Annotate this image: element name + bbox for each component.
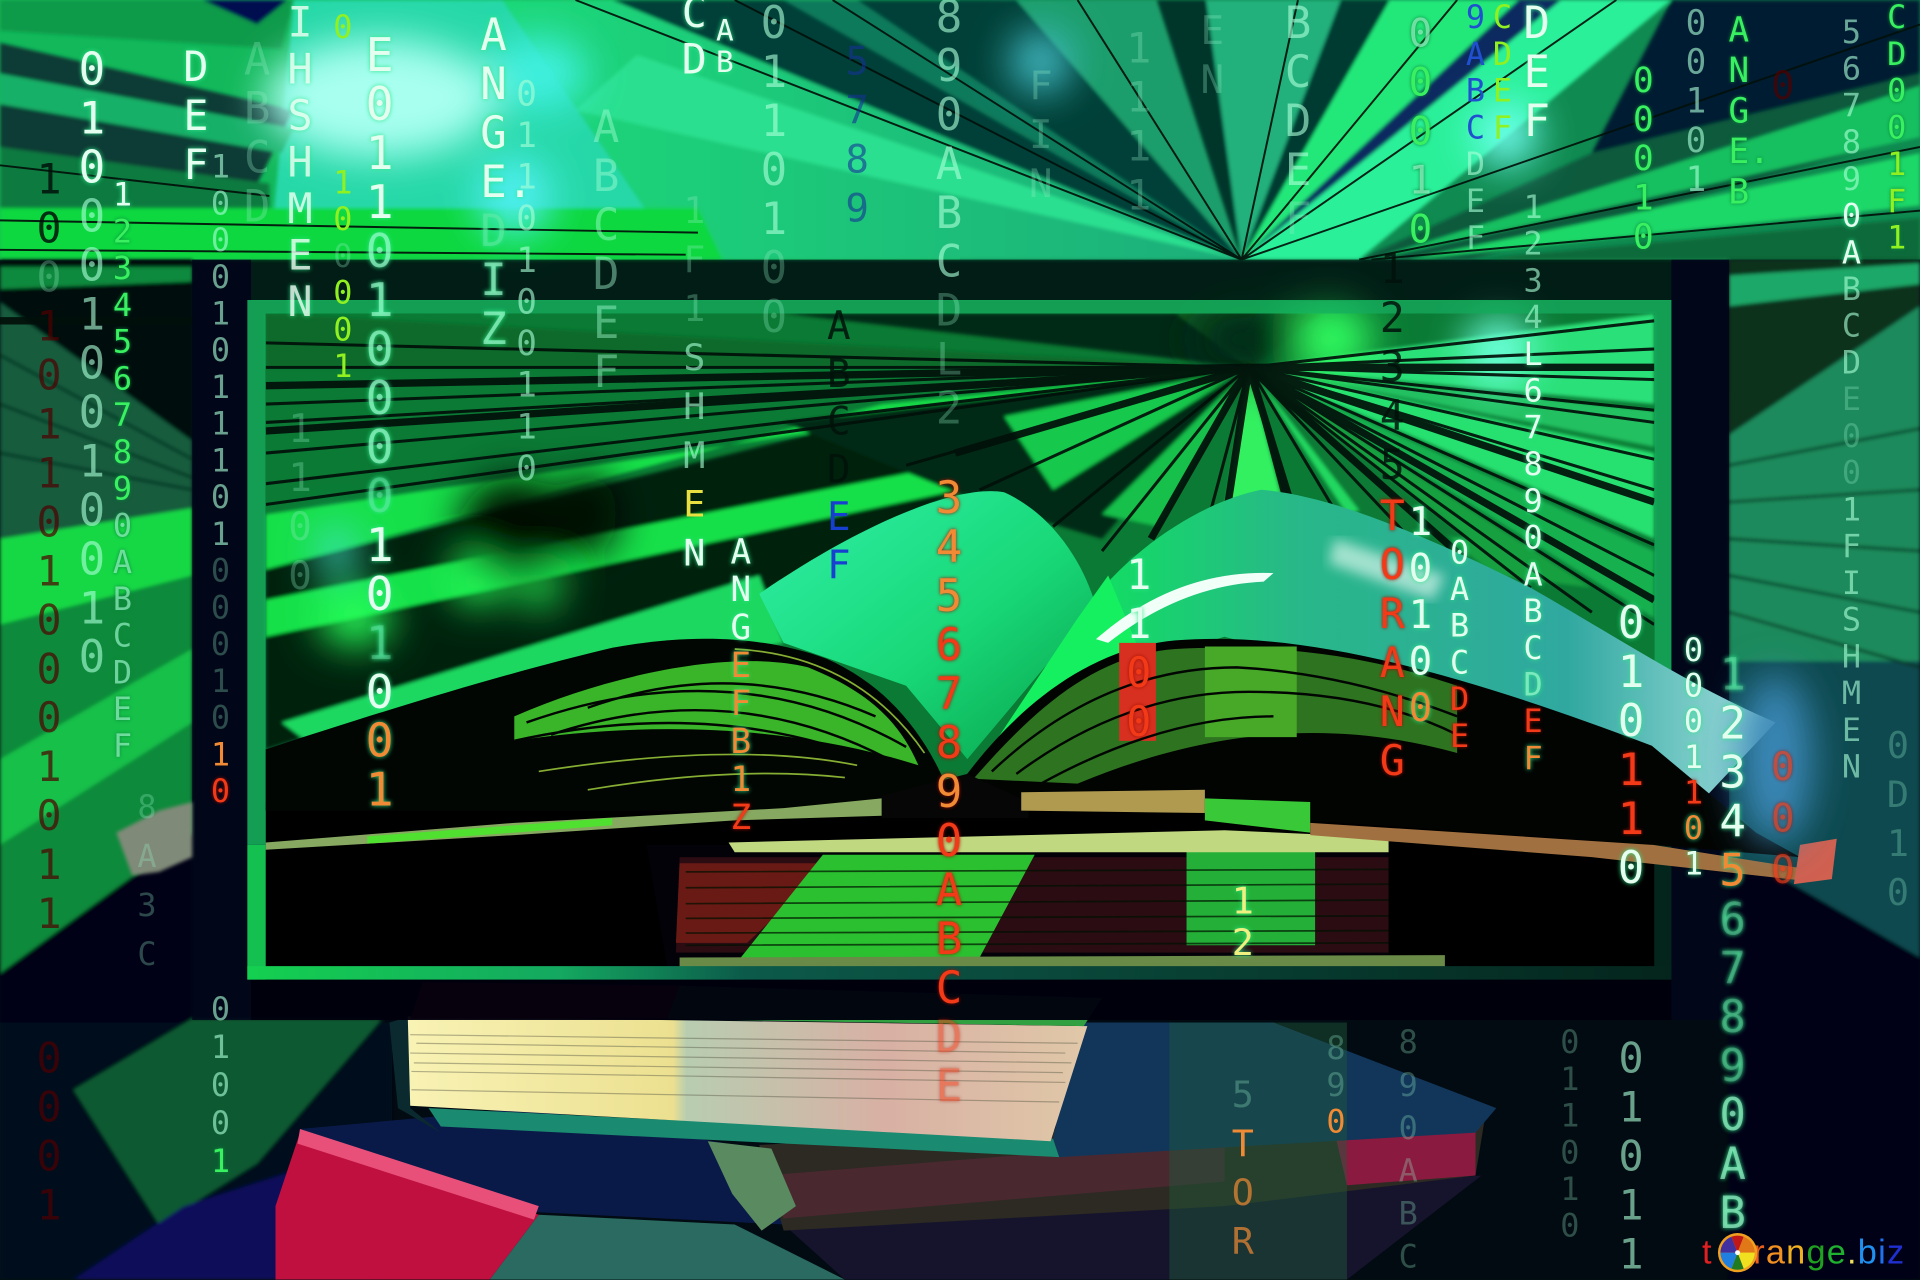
burst rays inside the frame <box>266 313 1654 749</box>
open book: right page block <box>960 639 1800 857</box>
green frame: lower left <box>247 845 266 980</box>
dark frame band: left <box>192 260 251 1020</box>
infographic root: 1234 <box>1523 190 1543 337</box>
infographic root: DEF <box>183 43 208 190</box>
infographic root: ABCDEF <box>593 103 619 398</box>
infographic root: IHSHMEN <box>287 0 313 327</box>
infographic root: FIN <box>1029 62 1053 207</box>
infographic root: AB <box>716 13 734 80</box>
infographic root: EN <box>1200 7 1224 103</box>
matrix code columns, left side <box>36 0 537 1280</box>
book: cream page block with teal cover <box>389 982 1496 1157</box>
infographic root: 1111 <box>1126 24 1151 220</box>
infographic root: 11 00 <box>1126 551 1151 747</box>
infographic root: 5 T OR <box>1232 1074 1254 1264</box>
infographic root: 010 0010010010 <box>79 45 105 683</box>
infographic root: 00010 <box>1633 60 1654 257</box>
black streaks through the rays <box>0 0 1920 624</box>
infographic root: 10 0 1011010001011 <box>36 156 62 939</box>
infographic root: 12345 <box>1380 245 1405 490</box>
dim green strip crossing lower books <box>1169 1022 1347 1280</box>
infographic root: 89 0 <box>1326 1031 1346 1141</box>
infographic root: TORANG <box>1380 492 1405 786</box>
infographic root: 0100 1 <box>211 992 230 1180</box>
book: green and red page edges <box>647 830 1445 972</box>
infographic root: ANGE. D IZ <box>480 11 533 355</box>
infographic root: L67890ABC D E F <box>1523 337 1543 778</box>
bright green frame: top and sides <box>247 300 1671 845</box>
green frame: bottom edge <box>247 966 1671 980</box>
infographic root: 12 <box>1232 880 1254 965</box>
infographic root: 00101 <box>1686 2 1706 200</box>
infographic root: 011010 <box>1560 1025 1579 1245</box>
infographic root: BCDE F <box>1285 0 1311 245</box>
infographic root: 000 <box>1771 743 1795 893</box>
open book: left page block <box>266 639 945 811</box>
infographic root: 1 234 5 6789 0AB <box>1719 650 1746 1239</box>
infographic root: 1010 0 <box>1409 498 1432 731</box>
open book: rising pages <box>759 490 1776 820</box>
infographic root: ANGEFB1Z <box>731 531 751 838</box>
infographic root: 010 11 0 <box>1618 599 1644 894</box>
infographic root: 890ABC DL2 <box>936 0 962 435</box>
infographic root: DEF <box>1523 0 1550 147</box>
icon: colour wheel logo <box>1718 1233 1758 1272</box>
infographic root: ABCD EF <box>827 302 851 588</box>
infographic root: 1F1 SHM E N <box>683 190 705 576</box>
side panels outside the frame <box>0 260 1920 1280</box>
book spine rope at left <box>116 802 192 876</box>
infographic root: ABCD <box>244 36 270 233</box>
infographic root: ANGE.B <box>1728 10 1770 212</box>
infographic root: 890ABC <box>1399 1025 1418 1276</box>
infographic root: CD00 1F1 <box>1887 0 1906 257</box>
infographic root: 0 00 1 0 <box>1409 10 1432 252</box>
infographic root: 9ABC DEF <box>1466 0 1485 257</box>
infographic root: 1 23456789 0ABCDEF <box>113 178 132 765</box>
infographic root: 5789 <box>845 38 869 231</box>
book: brown volume with green spine <box>708 1108 1487 1231</box>
infographic root: 10 0 001 <box>333 165 352 386</box>
infographic root: 0110100110 <box>516 73 537 489</box>
dark frame band: top <box>251 260 1671 301</box>
open book: cover edge strip <box>266 774 1837 884</box>
green frame: lower right <box>1654 845 1671 980</box>
upper left light washes <box>0 0 1242 260</box>
infographic root: 0001 1 0 1 <box>1684 633 1703 883</box>
infographic root: 10001011101 00010 1 0 <box>211 149 230 811</box>
upper right ray fan <box>1157 0 1920 260</box>
infographic root: 8A3C <box>137 790 157 973</box>
infographic root: 0001 <box>36 1035 62 1231</box>
dark frame band: right <box>1671 260 1729 1020</box>
infographic root: 0ABC DE <box>1450 535 1469 756</box>
infographic root: 1100 <box>288 405 312 599</box>
matrix code columns, right side <box>490 0 1909 1280</box>
infographic root: CDEF <box>1493 0 1512 147</box>
infographic root: E011010000101001 <box>366 28 394 817</box>
blue light behind the book end <box>1739 673 1812 845</box>
infographic root: 0 <box>333 10 352 47</box>
infographic root: 0 <box>1771 62 1795 109</box>
infographic root: 0D10 <box>1887 725 1909 915</box>
matrix code columns, centre <box>490 0 1311 1280</box>
infographic root: 345 678 9 0ABC DE <box>936 474 962 1112</box>
infographic root: 01011 <box>1618 1035 1644 1280</box>
watermark: torange.biz: t range.biz <box>1702 1233 1905 1271</box>
infographic root: 01101 00 <box>761 0 787 343</box>
infographic root: 56789 0A BCD E00 1FISHMEN <box>1842 15 1861 786</box>
dark frame band: bottom <box>251 980 1671 1020</box>
glow spots and bokeh <box>263 29 1538 645</box>
lower black interior of frame <box>266 802 1654 967</box>
book: bottom red volume <box>276 1108 1482 1280</box>
